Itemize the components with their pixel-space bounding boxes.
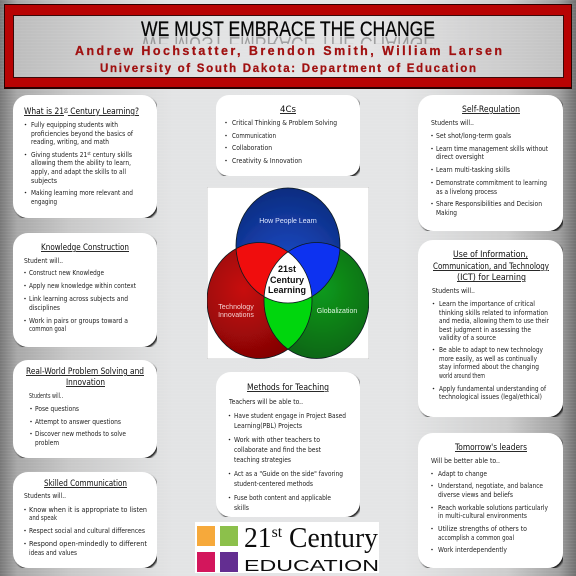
- intro: Students will..: [432, 286, 475, 295]
- affiliation: University of South Dakota: Department of Education: [100, 63, 476, 75]
- bullet list: Work interdependently: [438, 545, 508, 554]
- bullet list: Work in pairs or groups toward a: [29, 316, 128, 325]
- bullet list: [30, 404, 126, 447]
- bullet list: [433, 299, 549, 401]
- intro: Teachers will be able to..: [228, 397, 303, 406]
- intro: Students will..: [24, 491, 66, 500]
- bullet list: Learn multi-tasking skills: [436, 165, 510, 174]
- circle: globalization: [264, 242, 369, 358]
- bullet list: [431, 469, 549, 554]
- bullet list: diverse views and beliefs: [438, 490, 513, 499]
- bullet list: as a livelong process: [436, 187, 497, 196]
- overlap: blue and red: [236, 242, 288, 296]
- bullet list: Discover new methods to solve: [35, 429, 126, 438]
- heading: Methods for Teaching: [247, 383, 329, 393]
- bullet list: [24, 505, 147, 557]
- bullet list: [24, 268, 136, 333]
- circle: how people learn: [236, 188, 340, 303]
- label: 21st century learning: Century: [270, 275, 304, 285]
- label: technology innovations: Technology: [218, 304, 254, 311]
- bullet list: Attempt to answer questions: [35, 417, 121, 426]
- bullet list: [229, 411, 346, 512]
- bullet list: Fuse both content and applicable: [234, 493, 331, 502]
- bullet list: Learning(PBL) Projects: [234, 421, 302, 430]
- bullet list: [431, 131, 548, 217]
- logo text: 21st century: 21: [244, 523, 272, 554]
- bullet list: Link learning across subjects and: [29, 294, 128, 303]
- label: 21st century learning: Learning: [268, 285, 306, 295]
- bullet list: Understand, negotiate, and balance: [438, 481, 543, 490]
- label: how people learn: How People Learn: [259, 218, 317, 225]
- heading: Skilled Communication: [44, 479, 127, 489]
- heading: [433, 250, 549, 283]
- bullet list: Learn the importance of critical: [439, 299, 535, 308]
- bullet list: Have student engage in Project Based: [234, 411, 346, 420]
- venn diagram: [207, 187, 369, 359]
- heading: Real-World Problem Solving and: [26, 367, 144, 377]
- bullet list: Collaboration: [232, 143, 272, 152]
- bullet list: Act as a "Guide on the side" favoring: [234, 469, 343, 478]
- bullet list: Know when it is appropriate to listen: [29, 505, 147, 514]
- panel: 4Cs: [216, 95, 360, 176]
- intro: Student will..: [24, 256, 63, 265]
- bullet list: disciplines: [29, 303, 60, 312]
- circle: technology innovations: [207, 242, 312, 358]
- intro: Students will..: [431, 118, 474, 127]
- bullet list: Creativity & Innovation: [232, 156, 302, 165]
- heading: Century Learning?: [68, 107, 139, 117]
- bullet list: Respond open-mindedly to different: [29, 539, 147, 548]
- logo text: 21st century: Century: [282, 523, 378, 554]
- circle outlines: [207, 188, 369, 358]
- bullet list: Demonstrate commitment to learning: [436, 178, 547, 187]
- bullet list: Work with other teachers to: [234, 435, 320, 444]
- bullet list: apply, and adapt the skills to all: [31, 167, 126, 176]
- bullet list: and media, allowing them to use their: [439, 316, 549, 325]
- bullet list: Communication: [232, 131, 276, 140]
- label: globalization: Globalization: [317, 308, 357, 315]
- bullet list: problem: [35, 438, 59, 447]
- bullet list: Apply fundamental understanding of: [439, 384, 546, 393]
- bullet list: allowing them the ability to learn,: [31, 158, 131, 167]
- bullet list: stay informed about the changing: [439, 362, 539, 371]
- bullet list: Adapt to change: [438, 469, 487, 478]
- bullet list: century skills: [91, 150, 132, 159]
- bullet list: Reach workable solutions particularly: [438, 503, 549, 512]
- panel: methods for teaching: [216, 372, 360, 517]
- logo squares: [197, 526, 238, 572]
- bullet list: st: [87, 151, 91, 157]
- bullet list: ideas and values: [29, 548, 77, 557]
- bullet list: technological issues (legal/ethical): [439, 392, 542, 401]
- label: 21st century learning: 21st: [278, 264, 296, 274]
- authors: Andrew Hochstatter, Brendon Smith, William Larsen: [75, 44, 502, 58]
- panel: knowledge construction: [13, 233, 157, 347]
- bullet list: reading, writing, and math: [31, 137, 109, 146]
- bullet list: Learn time management skills without: [436, 144, 548, 153]
- heading: st: [64, 108, 68, 114]
- bullet list: engaging: [31, 197, 57, 206]
- bullet list: accomplish a common goal: [438, 533, 514, 542]
- bullet list: proficiencies beyond the basics of: [31, 129, 133, 138]
- overlap: red and green: [264, 261, 312, 349]
- bullet list: best judgment in assessing the: [439, 325, 531, 334]
- bullet list: student-centered methods: [234, 479, 313, 488]
- logo: 21st century education: [195, 522, 379, 575]
- bullet list: more easily, as well as continually: [439, 354, 538, 363]
- panel: use of information, communication, and technology: [418, 240, 563, 417]
- heading: Knowledge Construction: [41, 243, 129, 253]
- heading: Tomorrow's leaders: [454, 443, 527, 453]
- bullet list: Construct new Knowledge: [29, 268, 104, 277]
- heading: Self-Regulation: [462, 105, 520, 115]
- panel: skilled communication: [13, 472, 157, 568]
- heading: Innovation: [66, 378, 105, 388]
- bullet list: Fully equipping students with: [31, 120, 118, 129]
- bullet list: validity of a source: [439, 333, 496, 342]
- intro: Students will..: [29, 391, 63, 400]
- panel: tomorrow's leaders: [418, 433, 563, 568]
- bullet list: [225, 118, 337, 165]
- heading: Use of Information,: [453, 250, 528, 260]
- bullet list: thinking skills related to information: [439, 308, 548, 317]
- bullet list: Set shot/long-term goals: [436, 131, 511, 140]
- intro: Will be better able to..: [431, 456, 500, 465]
- heading: (ICT) for Learning: [457, 273, 526, 283]
- logo text: education: EDUCATION: [244, 558, 379, 575]
- title reflection: WE MUST EMBRACE THE CHANGE: [141, 32, 435, 55]
- heading: [26, 367, 144, 388]
- bullet list: [25, 120, 133, 206]
- bullet list: Utilize strengths of others to: [438, 524, 527, 533]
- bullet list: skills: [234, 503, 249, 512]
- heading: Communication, and Technology: [433, 262, 549, 272]
- bullet list: collaborate and find the best: [234, 445, 321, 454]
- overlap: center: [264, 252, 312, 303]
- bullet list: Critical Thinking & Problem Solving: [232, 118, 337, 127]
- panel: self-regulation: [418, 95, 563, 231]
- panel: what is 21st century learning: [13, 95, 157, 218]
- bullet list: direct oversight: [436, 152, 484, 161]
- bullet list: in multi-cultural environments: [438, 511, 527, 520]
- heading: 4Cs: [280, 105, 296, 115]
- bullet list: Apply new knowledge within context: [29, 281, 136, 290]
- logo text: 21st century: st: [272, 524, 283, 541]
- overlap: blue and green: [270, 242, 340, 296]
- bullet list: common goal: [29, 324, 66, 333]
- bullet list: subjects: [31, 176, 57, 185]
- bullet list: Share Responsibilities and Decision: [436, 199, 542, 208]
- heading: What is 21: [24, 107, 71, 117]
- bullet list: Be able to adapt to new technology: [439, 345, 544, 354]
- bullet list: world around them: [439, 371, 485, 380]
- bullet list: Making learning more relevant and: [31, 188, 133, 197]
- bullet list: Pose questions: [35, 404, 79, 413]
- label: technology innovations: Innovations: [218, 312, 254, 319]
- bullet list: Making: [436, 208, 457, 217]
- title: WE MUST EMBRACE THE CHANGE: [141, 18, 435, 41]
- bullet list: Giving students 21: [31, 150, 99, 159]
- bullet list: Respect social and cultural differences: [29, 526, 145, 535]
- bullet list: teaching strategies: [234, 455, 291, 464]
- panel: real-world problem solving: [13, 360, 157, 458]
- title banner: [4, 4, 572, 89]
- bullet list: and speak: [29, 513, 58, 522]
